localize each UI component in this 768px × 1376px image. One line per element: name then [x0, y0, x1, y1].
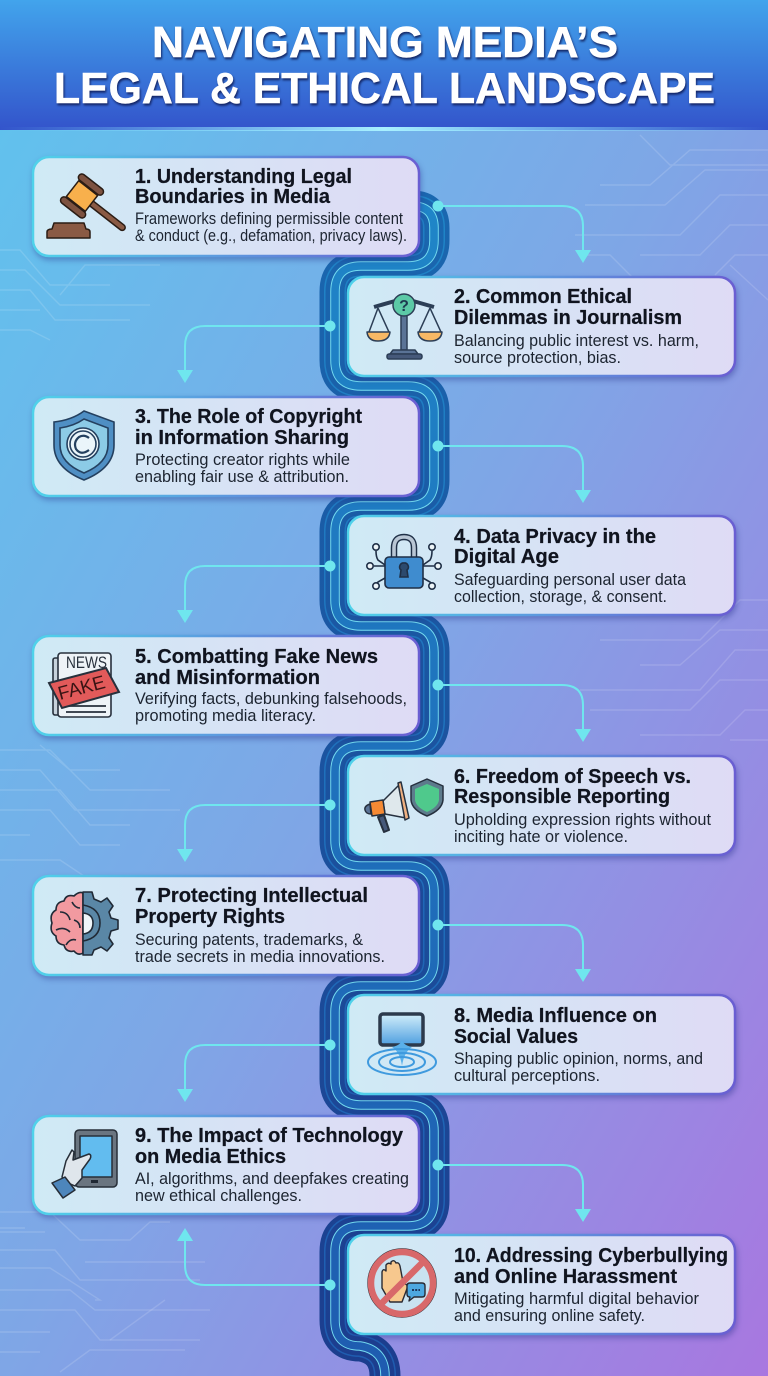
description 10: Mitigating harmful digital behavior	[454, 1289, 699, 1308]
description 1	[135, 209, 407, 245]
title: NAVIGATING MEDIA’S	[152, 18, 618, 67]
heading 6: 6. Freedom of Speech vs.	[454, 766, 691, 788]
panel: card 10 cyberbullying	[348, 1235, 735, 1334]
description 1: & conduct (e.g., defamation, privacy laws).	[135, 226, 407, 245]
circuit pattern left middle	[0, 745, 180, 880]
icon: megaphone and shield	[365, 779, 443, 832]
icon: fake newspaper	[49, 653, 119, 717]
description 5: Verifying facts, debunking falsehoods,	[135, 689, 407, 708]
arrow 5 to 6	[432, 680, 591, 742]
title	[54, 18, 715, 113]
icon: stop harassment sign	[368, 1249, 436, 1317]
heading 4: 4. Data Privacy in the	[454, 526, 656, 548]
heading 6: Responsible Reporting	[454, 786, 670, 808]
heading 5: and Misinformation	[135, 667, 320, 689]
description 5	[135, 689, 407, 725]
icon: digital padlock	[367, 537, 441, 589]
panel: card 3 copyright	[33, 397, 419, 496]
icon: copyright shield	[54, 411, 114, 480]
description 1: Frameworks defining permissible content	[135, 209, 403, 228]
circuit pattern left upper	[0, 250, 160, 340]
description 9	[135, 1169, 409, 1205]
description 2: Balancing public interest vs. harm,	[454, 331, 699, 350]
icon: fake newspaper: FAKE	[56, 672, 108, 705]
description 5: promoting media literacy.	[135, 706, 316, 725]
arrow 4 to 5	[177, 560, 336, 623]
heading 4: Digital Age	[454, 546, 559, 568]
panel: card 5 fake news	[33, 636, 419, 735]
circuit pattern top right	[575, 135, 768, 300]
arrow 8 to 9	[177, 1040, 336, 1102]
heading 1: 1. Understanding Legal	[135, 166, 352, 188]
heading 7	[135, 885, 368, 928]
description 6	[454, 810, 711, 846]
arrow 10 to 9	[177, 1228, 336, 1290]
description 8: cultural perceptions.	[454, 1066, 600, 1085]
icon: balance scales: ?	[399, 298, 409, 315]
arrow 9 to 10	[432, 1160, 591, 1222]
description 10: and ensuring online safety.	[454, 1306, 645, 1325]
panel: card 2 ethical dilemmas	[348, 277, 735, 376]
heading 1	[135, 166, 352, 208]
central winding ribbon	[335, 206, 434, 1376]
description 6: inciting hate or violence.	[454, 827, 628, 846]
icon: brain and gear	[51, 892, 118, 955]
header band	[0, 0, 768, 131]
heading 4	[454, 526, 656, 568]
circuit pattern bottom left	[0, 1212, 210, 1372]
panel: card 6 freedom of speech	[348, 756, 735, 855]
heading 2	[454, 286, 682, 329]
heading 9: on Media Ethics	[135, 1146, 286, 1168]
heading 8	[454, 1005, 657, 1048]
description 8: Shaping public opinion, norms, and	[454, 1049, 703, 1068]
description 2: source protection, bias.	[454, 348, 621, 367]
panel: card 7 intellectual property	[33, 876, 419, 975]
description 7: Securing patents, trademarks, &	[135, 930, 364, 949]
description 10	[454, 1289, 699, 1325]
heading 7: 7. Protecting Intellectual	[135, 885, 368, 907]
title: LEGAL & ETHICAL LANDSCAPE	[54, 64, 715, 113]
icon: tablet and robot hand	[52, 1130, 117, 1198]
heading 9	[135, 1125, 404, 1168]
description 9: new ethical challenges.	[135, 1186, 302, 1205]
heading 5: 5. Combatting Fake News	[135, 646, 378, 668]
heading 8: 8. Media Influence on	[454, 1005, 657, 1027]
heading 2: 2. Common Ethical	[454, 286, 632, 308]
heading 10: 10. Addressing Cyberbullying	[454, 1245, 728, 1267]
heading 3: in Information Sharing	[135, 427, 349, 449]
description 6: Upholding expression rights without	[454, 810, 711, 829]
icon: screen and ripples	[368, 1014, 436, 1075]
arrow 2 to 3	[177, 320, 336, 383]
heading 2: Dilemmas in Journalism	[454, 307, 682, 329]
description 2	[454, 331, 699, 367]
panel: card 4 data privacy	[348, 516, 735, 615]
heading 5	[135, 646, 378, 689]
heading 1: Boundaries in Media	[135, 186, 331, 208]
heading 8: Social Values	[454, 1026, 578, 1048]
arrow 3 to 4	[432, 440, 591, 503]
heading 3: 3. The Role of Copyright	[135, 406, 362, 428]
heading 10	[454, 1245, 728, 1288]
description 3: Protecting creator rights while	[135, 450, 350, 469]
heading 6	[454, 766, 691, 808]
panel: card 8 social values	[348, 995, 735, 1094]
arrow 7 to 8	[432, 920, 591, 982]
description 4: collection, storage, & consent.	[454, 587, 667, 606]
description 7	[135, 930, 385, 966]
description 8	[454, 1049, 703, 1085]
panel: card 1 legal boundaries	[33, 157, 419, 256]
icon: gavel	[47, 173, 136, 243]
heading 3	[135, 406, 362, 449]
description 9: AI, algorithms, and deepfakes creating	[135, 1169, 409, 1188]
icon: fake newspaper: NEWS	[66, 653, 107, 672]
description 3	[135, 450, 350, 486]
arrow 1 to 2	[432, 200, 591, 263]
heading 7: Property Rights	[135, 906, 285, 928]
description 4: Safeguarding personal user data	[454, 570, 687, 589]
panel: card 9 technology	[33, 1116, 419, 1214]
description 4	[454, 570, 687, 606]
arrow 6 to 7	[177, 800, 336, 862]
heading 9: 9. The Impact of Technology	[135, 1125, 404, 1147]
description 7: trade secrets in media innovations.	[135, 947, 385, 966]
circuit pattern right middle	[580, 600, 768, 740]
icon: balance scales	[367, 294, 442, 359]
heading 10: and Online Harassment	[454, 1266, 677, 1288]
description 3: enabling fair use & attribution.	[135, 467, 349, 486]
